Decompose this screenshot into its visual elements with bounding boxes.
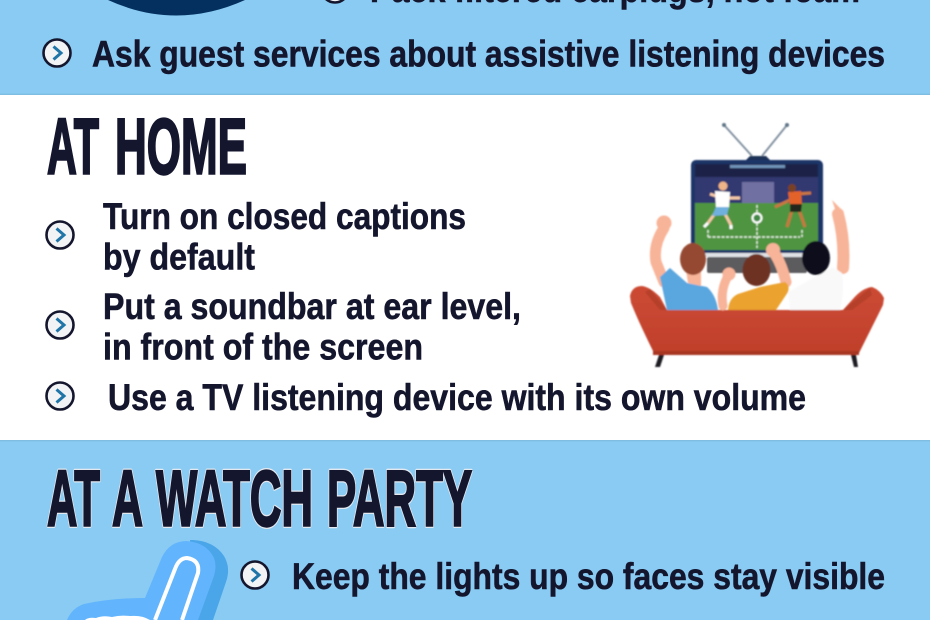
heading: at a watch party: A bbox=[112, 454, 143, 542]
icon: bullet TV listening device bbox=[46, 382, 74, 410]
heading: at a watch party: WATCH bbox=[156, 454, 313, 542]
panel: at the stadium bbox=[0, 0, 930, 95]
icon: stadium badge bbox=[108, 0, 245, 16]
icon: bullet captions bbox=[46, 222, 74, 248]
text: soundbar tip bbox=[103, 286, 521, 368]
icon: bullet lights bbox=[242, 562, 268, 588]
icon: foam finger bbox=[67, 540, 228, 620]
heading: at a watch party: WATCH bbox=[156, 454, 313, 542]
heading: at a watch party: A bbox=[112, 454, 143, 542]
icon: bullet guest services bbox=[44, 40, 70, 66]
person: woman in yellow bbox=[722, 243, 789, 310]
text: captions tip: by default bbox=[103, 236, 255, 278]
heading: at a watch party bbox=[47, 454, 472, 542]
panel: at home bbox=[0, 95, 930, 441]
television bbox=[691, 160, 823, 253]
text: captions tip bbox=[103, 196, 466, 278]
text: captions tip: Turn on closed captions bbox=[103, 196, 466, 237]
heading: at home: AT bbox=[47, 102, 99, 190]
heading: at a watch party: AT bbox=[47, 454, 100, 542]
text: soundbar tip: Put a soundbar at ear level, bbox=[103, 286, 521, 327]
heading: at a watch party: AT bbox=[47, 454, 100, 542]
panel: at a watch party bbox=[0, 440, 930, 620]
text: soundbar tip: in front of the screen bbox=[103, 326, 423, 368]
player in white bbox=[704, 182, 740, 229]
text: TV listening device tip: Use a TV listening device with its own volume bbox=[108, 377, 806, 418]
person: man in white bbox=[788, 200, 844, 310]
player in orange bbox=[775, 184, 811, 227]
heading: at a watch party: PARTY bbox=[327, 454, 472, 542]
heading: at home: HOME bbox=[115, 102, 247, 190]
antenna bbox=[722, 123, 789, 160]
sofa bbox=[630, 286, 884, 367]
icon: bullet earplugs bbox=[322, 0, 348, 2]
person: man in blue bbox=[655, 216, 718, 310]
heading: at home bbox=[47, 102, 247, 190]
icon: bullet soundbar bbox=[46, 312, 74, 338]
heading: at a watch party: PARTY bbox=[327, 454, 472, 542]
soundbar bbox=[707, 257, 807, 273]
illustration: family watching soccer on TV bbox=[630, 123, 884, 367]
